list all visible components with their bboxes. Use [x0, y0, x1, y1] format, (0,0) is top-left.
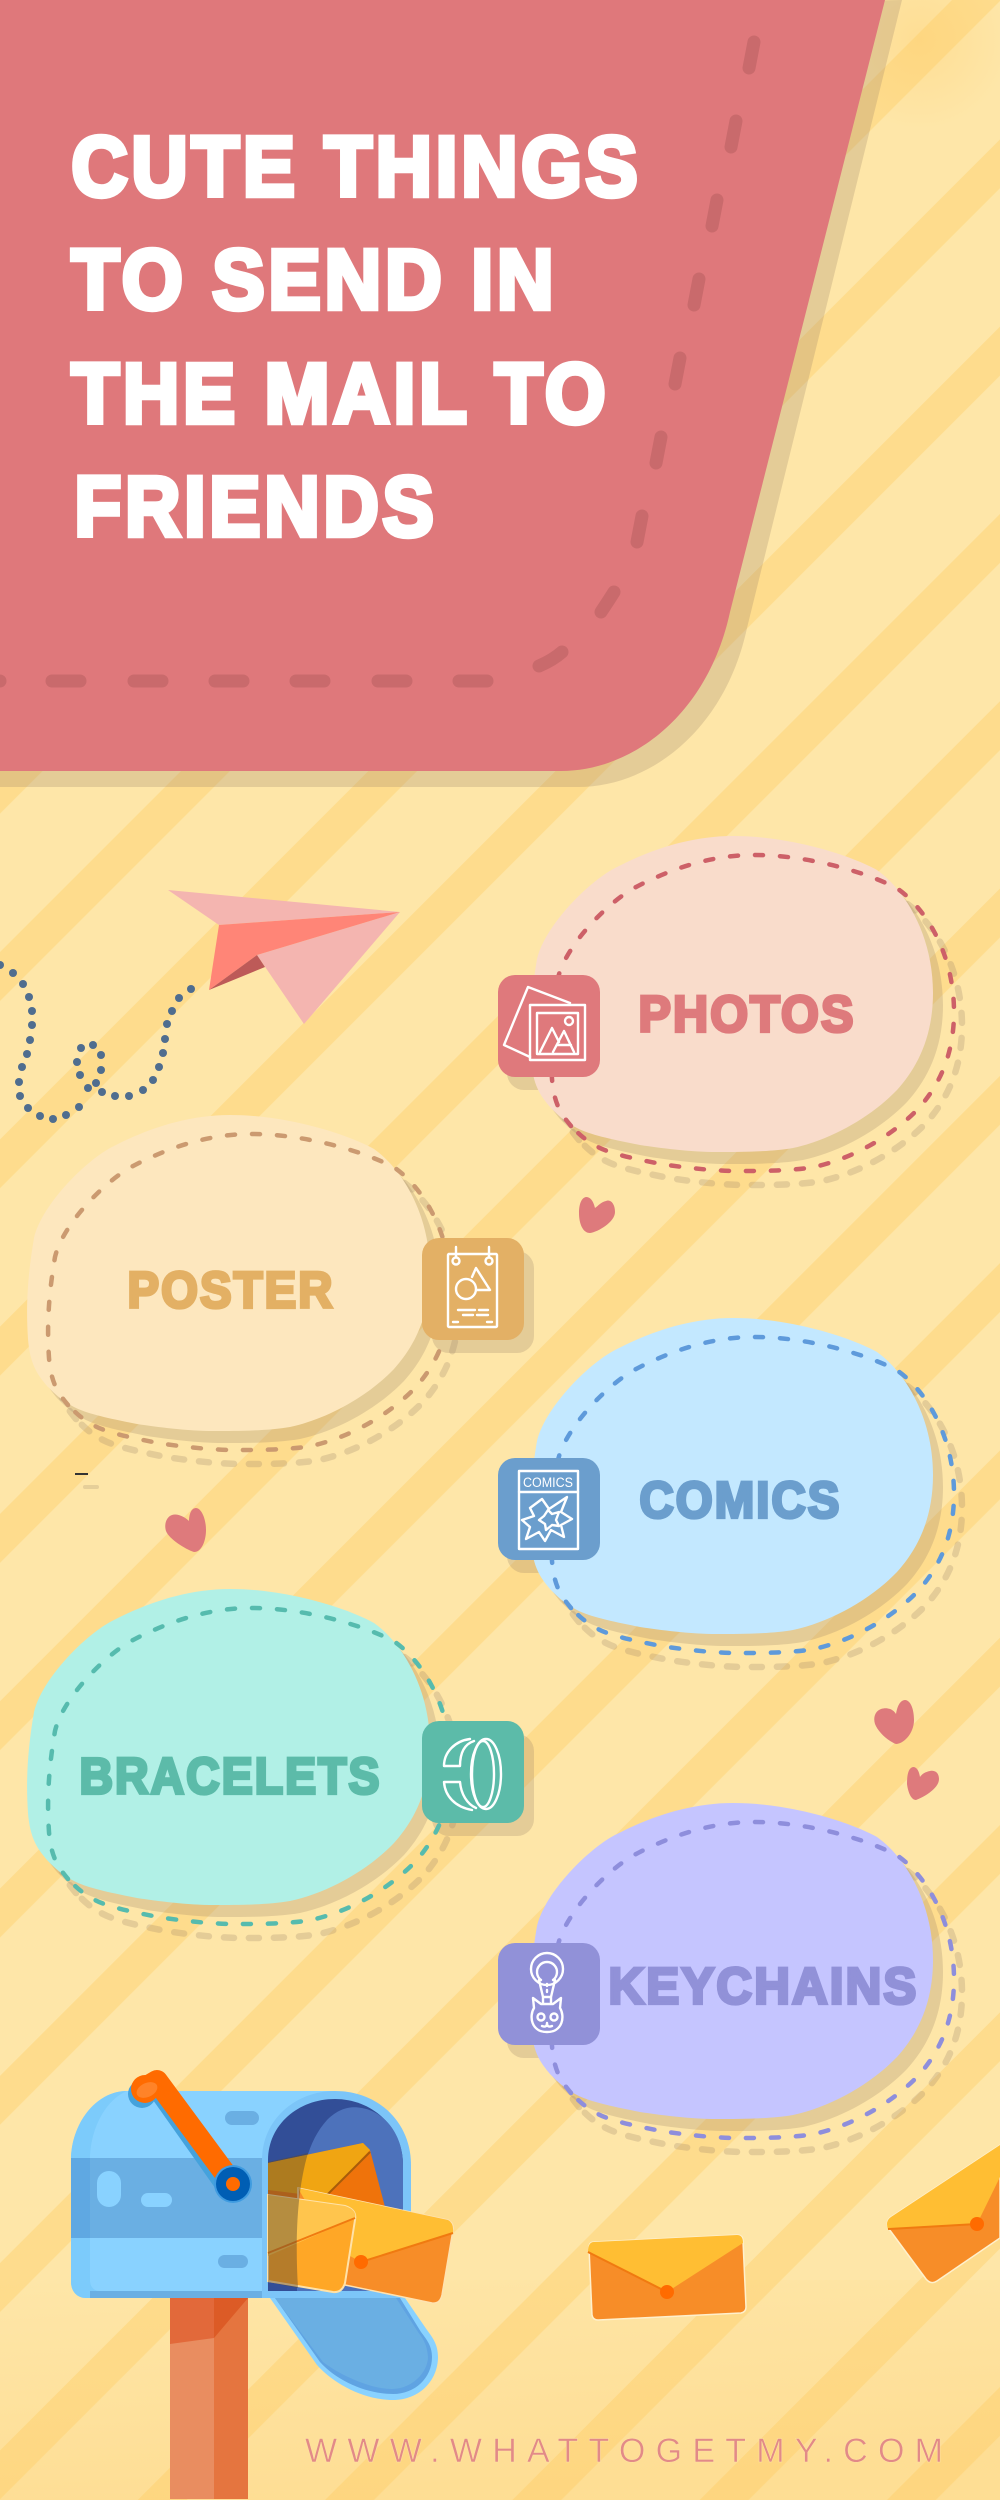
label: poster: POSTER: [128, 1262, 334, 1319]
mailbox opening: [262, 2091, 411, 2298]
title: [72, 121, 642, 554]
envelope: right: [887, 2145, 1000, 2283]
mailbox flag: [128, 2075, 252, 2203]
website footer: WWW.WHATTOGETMY.COM: [305, 2432, 943, 2470]
panel: keychains: [498, 1803, 962, 2152]
header banner: [0, 0, 902, 787]
mailbox illustration: [71, 2075, 453, 2499]
panel: bracelets: [27, 1589, 534, 1938]
title: FRIENDS: [74, 461, 438, 554]
icon: comics: COMICS: [523, 1475, 573, 1490]
label: comics: COMICS: [640, 1472, 842, 1529]
small stray tick: [75, 1473, 99, 1489]
envelope in front of mailbox: [268, 2195, 355, 2292]
label: bracelets: BRACELETS: [80, 1748, 382, 1805]
panel: poster: [27, 1115, 534, 1464]
label: photos: PHOTOS: [638, 986, 855, 1043]
icon: keychain: [498, 1943, 600, 2045]
icon: poster: [422, 1238, 524, 1340]
panel: photos: [498, 836, 962, 1185]
icon: heart near photos: [579, 1197, 615, 1233]
icon: heart near bracelets: [165, 1508, 206, 1552]
mailbox door flap: [270, 2298, 438, 2400]
panel: comics: [498, 1318, 962, 1667]
icon: photos: [498, 975, 600, 1077]
envelopes shaded by mailbox: [268, 2153, 308, 2288]
paper plane: [168, 890, 400, 1024]
label: keychains: KEYCHAINS: [608, 1958, 918, 2015]
title: TO SEND IN: [72, 234, 557, 327]
title: THE MAIL TO: [72, 348, 610, 441]
icon: heart lower right: [907, 1767, 939, 1800]
title: CUTE THINGS: [72, 121, 642, 214]
icon: bracelet: [422, 1721, 524, 1823]
dotted flight trail: [0, 961, 195, 1123]
envelope sticking out of mailbox: [298, 2188, 453, 2303]
mailbox post: [170, 2298, 248, 2499]
icon: comics: [498, 1458, 600, 1560]
mailbox body: [71, 2091, 335, 2298]
envelope: middle: [588, 2235, 746, 2320]
icon: heart upper right: [874, 1700, 914, 1744]
envelope in back of mailbox: [268, 2143, 385, 2240]
